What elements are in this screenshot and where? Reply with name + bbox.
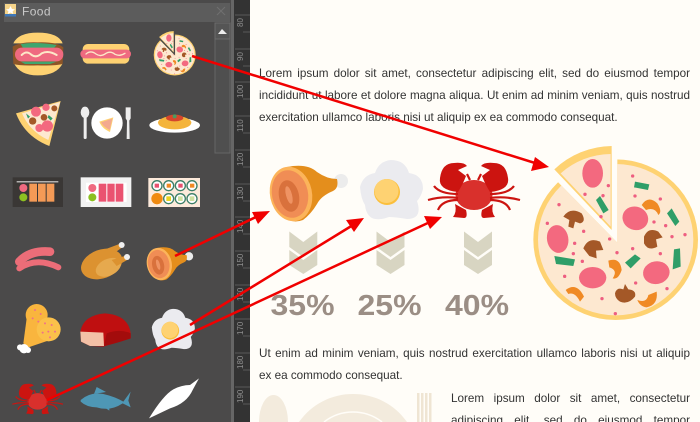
ruler: 160: [236, 287, 245, 301]
ruler: 170: [236, 321, 245, 335]
scrollbar: [215, 0, 234, 422]
icon: tuna sashimi tray: [81, 177, 131, 207]
ruler: 110: [236, 119, 245, 132]
arrow: egg: [190, 218, 364, 325]
ruler: 90: [236, 52, 245, 61]
icon: ham small: [144, 245, 193, 283]
ruler: 100: [236, 84, 245, 98]
chevrons: [289, 232, 492, 274]
icon: beef steak: [80, 313, 131, 347]
page background: [250, 0, 700, 422]
text block: intro paragraph: exercitation ullamco laboris nisi ut aliquip ex ea commodo consequat.: [259, 111, 618, 124]
percentages: 35%: [270, 290, 335, 322]
percentages: [270, 290, 509, 322]
icon: crab: [428, 163, 520, 218]
arrow: ham: [175, 211, 270, 256]
ruler: 190: [236, 389, 245, 403]
ruler: 150: [236, 253, 245, 267]
icon: pizza: [154, 31, 196, 75]
icon: shell: [149, 378, 199, 418]
text block: lower paragraph: Lorem ipsum dolor sit amet, consectetur: [451, 392, 690, 405]
icon: plate and cutlery: [81, 107, 131, 139]
ruler: [234, 0, 250, 422]
icon: burger: [13, 33, 63, 75]
arrow: pizza: [192, 56, 549, 171]
ruler: 120: [236, 152, 245, 166]
shapes panel: Food: [0, 0, 234, 422]
icon: sushi rolls: [148, 178, 200, 207]
arrow: crab: [47, 216, 442, 400]
icon: crab small: [12, 384, 63, 414]
text block: intro paragraph: [259, 63, 690, 129]
panel title bar: [4, 3, 230, 22]
ruler: 140: [236, 219, 245, 233]
icon: hot dog: [80, 44, 131, 64]
ruler: 180: [236, 355, 245, 369]
text block: middle paragraph: Ut enim ad minim veniam, quis nostrud exercitation ullamco laboris nisi ut aliquip: [259, 347, 690, 360]
text block: middle paragraph: [259, 343, 690, 387]
icon: pizza slice: [16, 101, 61, 146]
percentages: 40%: [445, 290, 509, 322]
ruler: 130: [236, 186, 245, 200]
icon: chicken leg: [17, 304, 61, 353]
text block: intro paragraph: Lorem ipsum dolor sit amet, consectetur adipiscing elit, sed do eiusmod tempor: [259, 67, 690, 80]
icon: fried egg: [360, 160, 423, 219]
icon: plate and cutlery watermark: [259, 393, 432, 422]
ruler: 80: [236, 18, 245, 27]
text block: intro paragraph: incididunt ut labore et dolore magna aliqua. Ut enim ad minim veniam, quis nostrud: [259, 89, 690, 102]
icon: roast chicken: [77, 242, 130, 285]
panel title bar: Food: [22, 4, 51, 18]
arrows: [47, 56, 549, 400]
pizza: [533, 146, 698, 320]
icon: salmon sashimi tray: [13, 177, 63, 207]
icon: spaghetti plate: [149, 114, 200, 133]
icon: egg small: [152, 309, 195, 349]
text block: middle paragraph: ex ea commodo consequat.: [259, 369, 403, 382]
percentages: 25%: [358, 290, 422, 322]
icon: ham: [265, 163, 348, 225]
icon: tuna: [81, 387, 131, 411]
text block: lower paragraph: [451, 388, 690, 422]
icon: sausages: [19, 251, 58, 268]
